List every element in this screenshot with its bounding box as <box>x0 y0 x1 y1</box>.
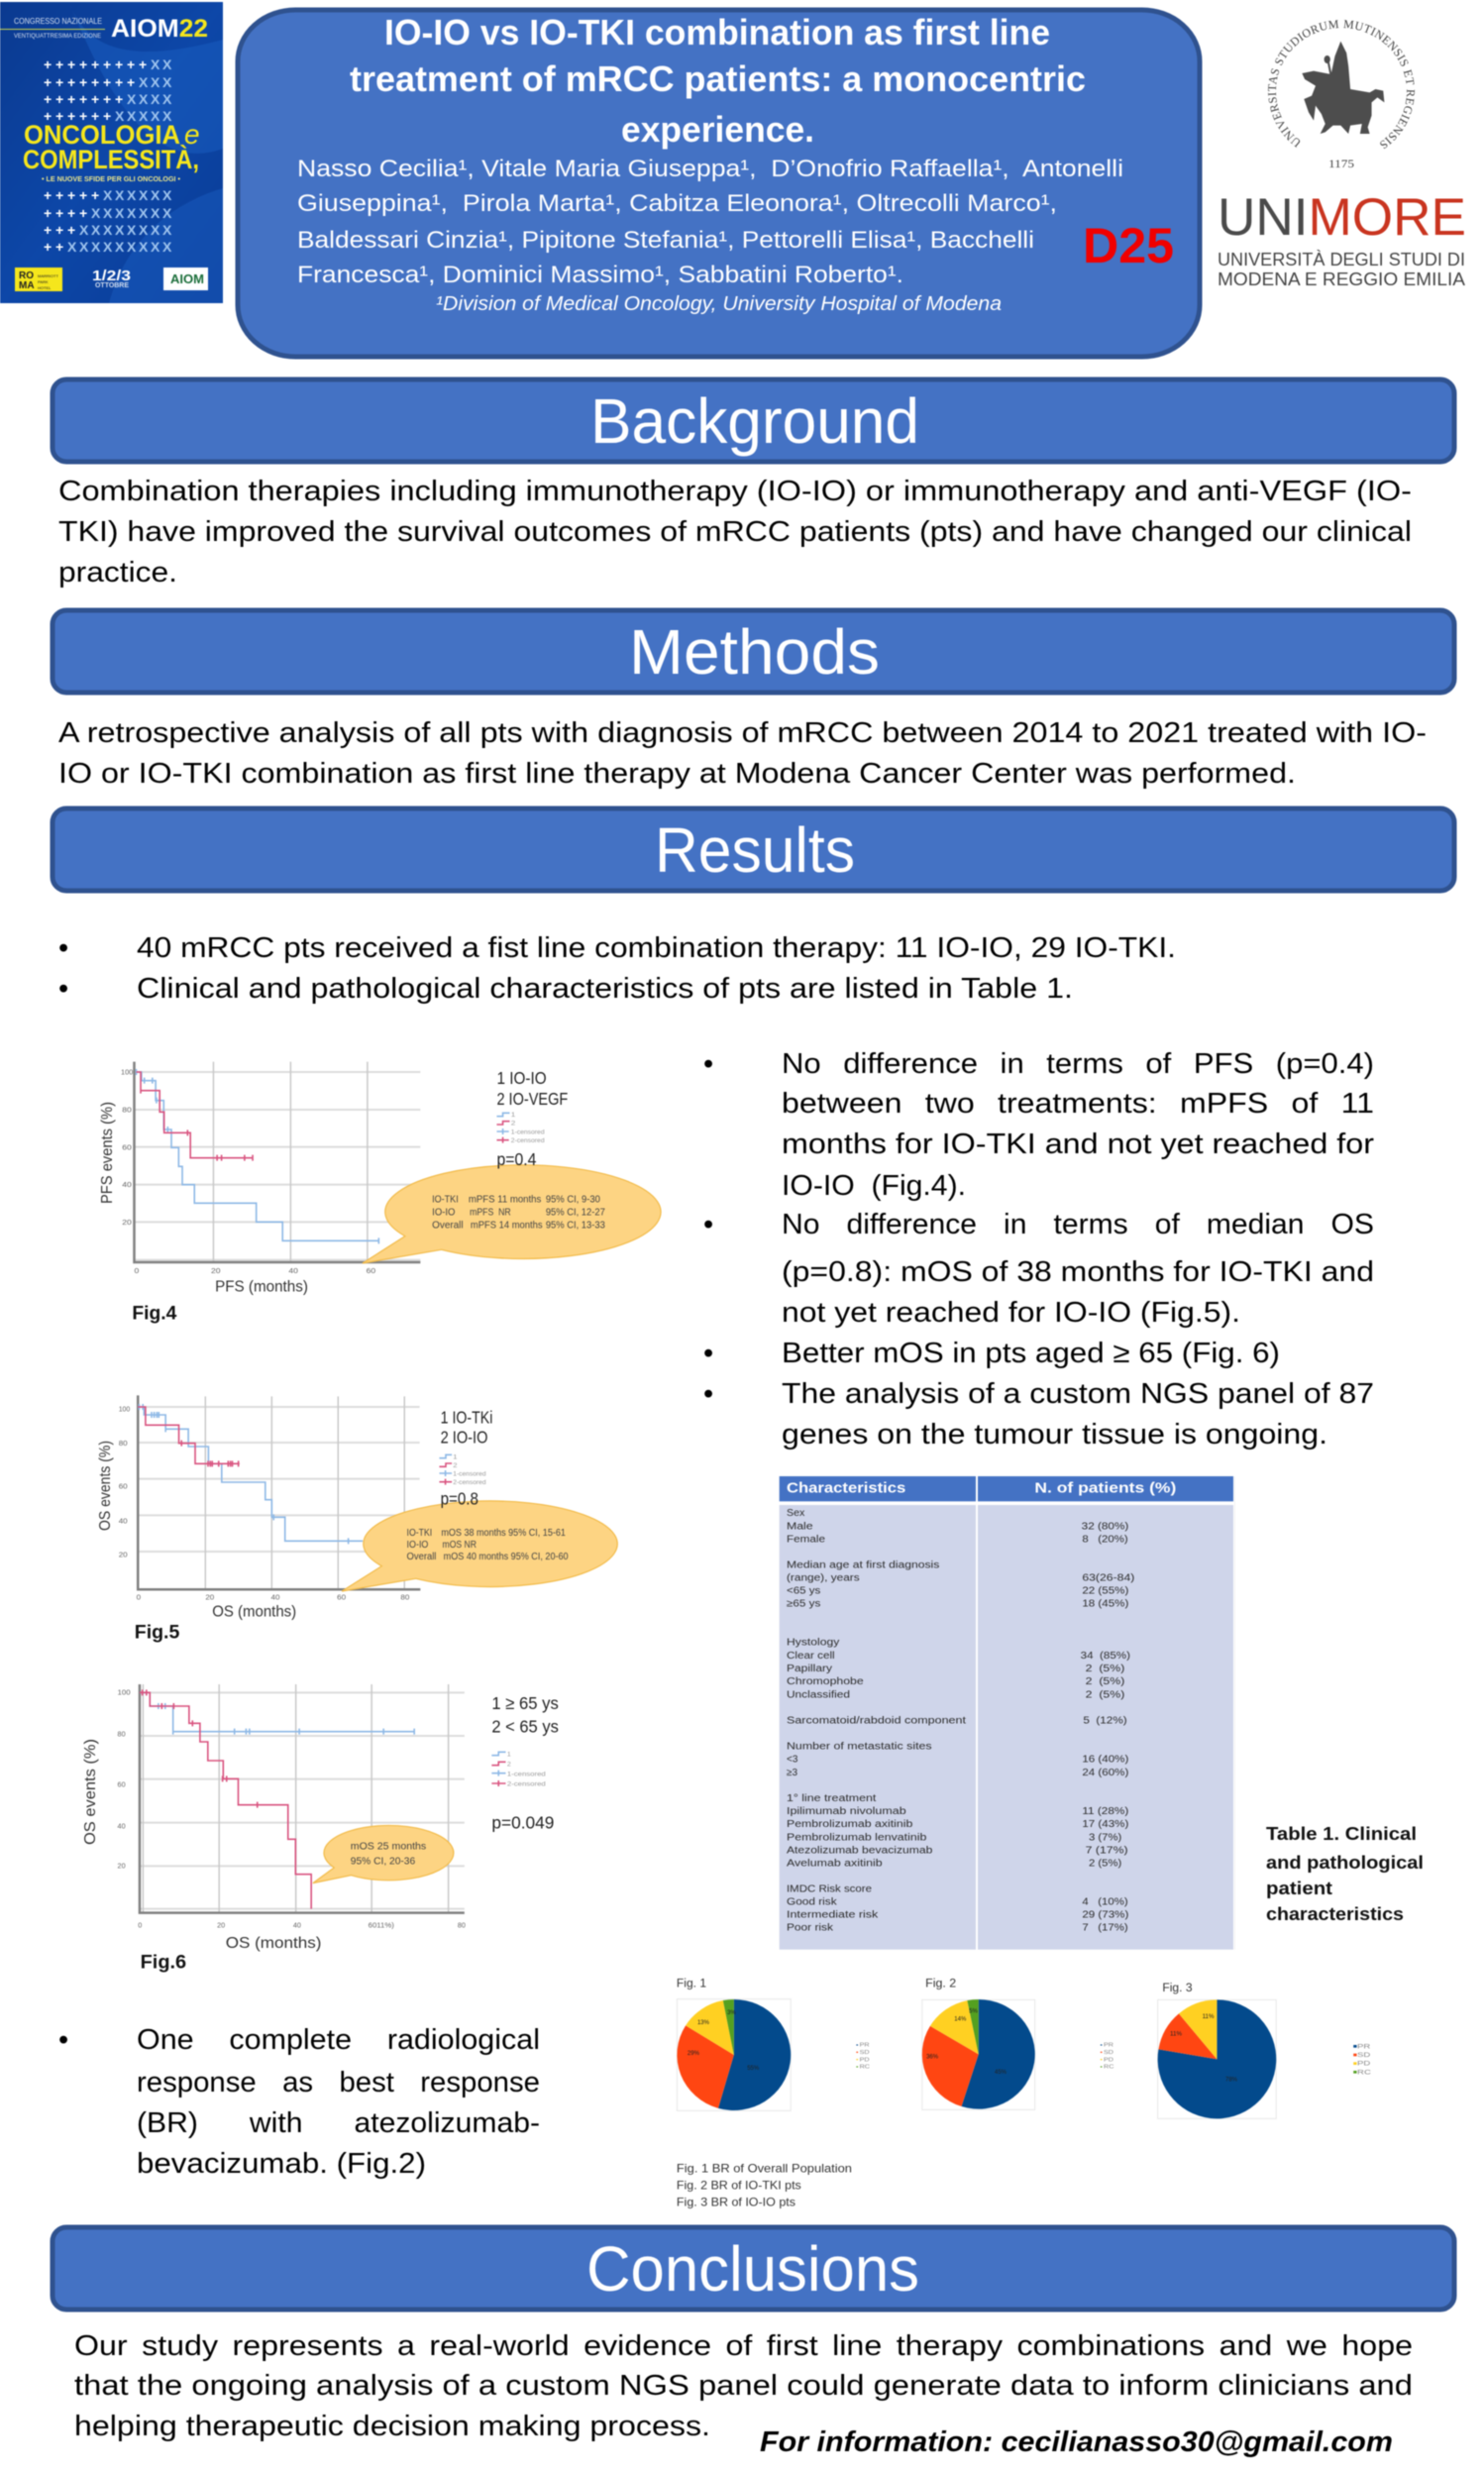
pie: Fig. 1 overall population <box>677 1978 871 2110</box>
complete response bullet: response as best response <box>137 2067 540 2098</box>
legend: SD <box>1357 2051 1370 2059</box>
values column: 17 (43%) <box>1082 1819 1128 1830</box>
congress logo: AIOM22: VENTIQUATTRESIMA EDIZIONE <box>14 33 102 40</box>
congress logo: AIOM22: +++++++ XXXX <box>44 91 172 107</box>
y axis ticks: 60 <box>118 1780 126 1788</box>
table caption: characteristics <box>1266 1904 1404 1924</box>
x axis ticks: 60 <box>337 1593 346 1602</box>
values column: 18 (45%) <box>1082 1599 1128 1610</box>
university logo: UNIMORE: UNIVERSITÀ DEGLI STUDI DI <box>1218 250 1465 269</box>
y axis ticks <box>118 1689 131 1871</box>
legend: PR <box>1104 2043 1114 2048</box>
pie: Fig. 2 IO-TKI <box>922 1978 1114 2109</box>
legend: 1 ≥ 65 ys <box>491 1692 559 1713</box>
right results bullets: No difference in terms of PFS (p=0.4) <box>782 1048 1374 1080</box>
background text: practice. <box>58 557 177 589</box>
x axis ticks: 80 <box>400 1593 409 1602</box>
results intro bullets: 40 mRCC pts received a fist line combination therapy: 11 IO-IO, 29 IO-TKI. <box>137 932 1176 964</box>
y axis ticks: 40 <box>119 1517 128 1525</box>
y axis ticks: 100 <box>118 1689 131 1697</box>
y axis ticks: 80 <box>118 1730 126 1738</box>
x axis ticks: 40 <box>271 1593 279 1602</box>
callout: 95% CI, 12-27 <box>546 1208 605 1218</box>
y axis ticks: 20 <box>122 1219 132 1227</box>
pie: Fig. 2 IO-TKI: 14% <box>954 2015 967 2022</box>
legend <box>491 1692 559 1833</box>
characteristics column: Unclassified <box>787 1689 850 1700</box>
congress logo: AIOM22: AIOM <box>170 271 204 286</box>
legend: 2 <box>453 1461 458 1469</box>
legend: 1 <box>511 1111 515 1119</box>
legend <box>496 1069 568 1169</box>
legend: 1-censored <box>511 1128 545 1135</box>
seal: 1175 <box>1328 157 1354 170</box>
callout: IO-IO <box>432 1208 455 1218</box>
complete response bullet: • <box>58 2024 68 2056</box>
x axis ticks <box>134 1267 376 1275</box>
legend: 2 IO-IO <box>441 1428 487 1448</box>
pie: Fig. 2 IO-TKI: 36% <box>926 2053 939 2060</box>
chart: Fig.6 OS Kaplan-Meier by age <box>82 1684 559 1974</box>
section bar: Results: Results <box>655 814 855 886</box>
right results bullets: • <box>703 1209 713 1240</box>
characteristics column: Male <box>787 1521 813 1532</box>
conclusions text <box>74 2330 1413 2442</box>
legend: PR <box>860 2043 870 2048</box>
x axis ticks: 40 <box>288 1267 299 1275</box>
y axis ticks: 40 <box>118 1822 126 1830</box>
characteristics column: Ipilimumab nivolumab <box>787 1806 906 1817</box>
callout: IO-IO <box>407 1540 429 1551</box>
methods text: A retrospective analysis of all pts with diagnosis of mRCC between 2014 to 2021 treated with IO- <box>58 717 1427 749</box>
results intro bullets: • <box>58 973 68 1005</box>
callout: 95% CI, 20-36 <box>351 1856 415 1868</box>
values column: 63(26-84) <box>1082 1573 1134 1584</box>
table caption: patient <box>1266 1879 1332 1898</box>
section bar: Background: Background <box>590 385 919 457</box>
complete response bullet: bevacizumab. (Fig.2) <box>137 2148 426 2180</box>
title panel <box>238 10 1200 357</box>
y axis ticks: 40 <box>122 1181 132 1189</box>
chart: Fig.6 OS Kaplan-Meier by age: Fig.6 <box>141 1953 186 1974</box>
characteristics column: Hystology <box>787 1638 839 1649</box>
title: experience. <box>621 109 814 150</box>
legend: PR <box>1357 2043 1370 2050</box>
congress logo: AIOM22: MARRIOTT <box>38 273 58 278</box>
right results bullets: months for IO-TKI and not yet reached for <box>782 1129 1374 1160</box>
right results bullets: IO-IO (Fig.4). <box>782 1170 966 1202</box>
callout: 95% CI, 13-33 <box>546 1221 605 1231</box>
pie: Fig. 3 IO-IO <box>1158 1982 1371 2118</box>
right results bullets: No difference in terms of median OS <box>782 1209 1374 1240</box>
characteristics column: <65 ys <box>787 1586 820 1597</box>
characteristics column: Female <box>787 1534 826 1545</box>
curve: age 65 or older <box>140 1692 414 1735</box>
values column: 11 (28%) <box>1082 1806 1128 1817</box>
characteristics column: Pembrolizumab lenvatinib <box>787 1832 927 1843</box>
y axis title: OS events (%) <box>82 1739 99 1845</box>
congress logo: AIOM22: CONGRESSO NAZIONALE <box>14 16 102 26</box>
values column: 24 (60%) <box>1082 1768 1128 1778</box>
characteristics column: Sex <box>787 1508 804 1519</box>
chart: Fig.4 PFS Kaplan-Meier: Fig.4 <box>132 1304 176 1324</box>
legend: 2 IO-VEGF <box>496 1090 568 1109</box>
legend: RC <box>860 2065 871 2070</box>
congress logo: AIOM22: OTTOBRE <box>95 282 129 289</box>
complete response bullet <box>58 2024 540 2180</box>
callout: mPFS 11 months <box>469 1194 542 1205</box>
congress logo: AIOM22: +++++++++ XX <box>44 56 172 72</box>
legend: p=0.4 <box>496 1150 536 1169</box>
y axis ticks: 60 <box>122 1143 132 1151</box>
right results bullets: Better mOS in pts aged ≥ 65 (Fig. 6) <box>782 1338 1280 1369</box>
section bar: Methods: Methods <box>629 616 880 688</box>
authors: Baldessari Cinzia¹, Pipitone Stefania¹, Pettorelli Elisa¹, Bacchelli <box>297 227 1034 254</box>
seal: UNIVERSITAS STUDIORUM MUTINENSIS ET REGIENSIS <box>1267 20 1416 150</box>
legend <box>1101 2043 1114 2070</box>
y axis title: PFS events (%) <box>99 1102 116 1204</box>
table header: N. of patients (%) <box>1034 1481 1176 1497</box>
legend: 1 IO-IO <box>496 1069 547 1088</box>
table caption: and pathological <box>1266 1853 1424 1873</box>
legend: 2 <box>511 1119 515 1127</box>
complete response bullet: One complete radiological <box>137 2024 540 2056</box>
congress logo: AIOM22: ++++ XXXXXXX <box>44 205 172 221</box>
values column: 2 (5%) <box>1086 1664 1124 1674</box>
legend: 1-censored <box>507 1771 546 1777</box>
legend: PD <box>860 2057 870 2063</box>
curve: IO-VEGF <box>137 1072 253 1161</box>
legend: RC <box>1357 2069 1371 2076</box>
values column: 32 (80%) <box>1082 1521 1128 1532</box>
section bar: Conclusions: Conclusions <box>586 2233 919 2305</box>
congress logo: AIOM22: ++++++++ XXX <box>44 74 172 90</box>
congress logo: AIOM22: 1/2/3 <box>92 268 131 284</box>
callout: Overall <box>432 1221 464 1231</box>
pie: Fig. 2 IO-TKI: 45% <box>995 2068 1007 2076</box>
x axis ticks: 40 <box>293 1922 301 1930</box>
characteristics column: Median age at first diagnosis <box>787 1559 939 1570</box>
values column: 2 (5%) <box>1086 1676 1124 1687</box>
characteristics column <box>787 1508 966 1934</box>
right results bullets: The analysis of a custom NGS panel of 87 <box>782 1378 1374 1410</box>
curve: under 65 <box>140 1689 311 1909</box>
right results bullets: • <box>703 1048 713 1080</box>
x axis ticks: 0 <box>138 1922 142 1930</box>
pie: Fig. 1 overall population: 55% <box>747 2064 760 2072</box>
values column: 4 (10%) <box>1082 1897 1128 1908</box>
title: IO-IO vs IO-TKI combination as first line <box>384 12 1050 53</box>
table header <box>787 1481 1176 1497</box>
legend: 1-censored <box>453 1470 486 1477</box>
callout <box>313 1825 454 1883</box>
pie: Fig. 1 overall population: 29% <box>688 2049 699 2057</box>
legend: p=0.8 <box>441 1489 478 1509</box>
y axis ticks: 100 <box>119 1405 130 1413</box>
callout: IO-TKI <box>407 1528 432 1539</box>
poster number: D25 <box>1083 218 1174 273</box>
legend <box>439 1408 492 1509</box>
y axis ticks: 100 <box>121 1068 134 1076</box>
pie captions <box>677 2163 852 2209</box>
pie: Fig. 1 overall population: 3% <box>727 2008 736 2016</box>
legend: SD <box>860 2050 870 2056</box>
conclusions text: that the ongoing analysis of a custom NGS panel could generate data to inform clinicians and <box>74 2370 1413 2402</box>
authors: Francesca¹, Dominici Massimo¹, Sabbatini Roberto¹. <box>297 262 903 288</box>
x axis ticks: 20 <box>205 1593 214 1602</box>
chart: Fig.4 PFS Kaplan-Meier: PFS (months) <box>215 1277 308 1295</box>
pie: Fig. 1 overall population: 13% <box>697 2018 709 2026</box>
callout: Overall <box>407 1552 436 1562</box>
pie captions: Fig. 3 BR of IO-IO pts <box>677 2197 795 2209</box>
callout <box>363 1165 661 1263</box>
characteristics column: Chromophobe <box>787 1676 864 1687</box>
pie: Fig. 2 IO-TKI: Fig. 2 <box>925 1978 956 1990</box>
congress logo: AIOM22: • LE NUOVE SFIDE PER GLI ONCOLOGI • <box>42 176 181 183</box>
pie: Fig. 3 IO-IO: 78% <box>1225 2076 1237 2083</box>
x axis ticks: 6011%) <box>369 1922 394 1930</box>
values column: 16 (40%) <box>1082 1755 1128 1766</box>
pie captions: Fig. 2 BR of IO-TKI pts <box>677 2180 801 2193</box>
callout: mOS 40 months 95% CI, 20-60 <box>444 1552 569 1562</box>
section bar: Conclusions <box>53 2227 1454 2310</box>
characteristics column: Clear cell <box>787 1651 835 1662</box>
callout: mOS 25 months <box>351 1841 426 1853</box>
table 1: patient characteristics <box>780 1476 1235 1950</box>
characteristics column: Sarcomatoid/rabdoid component <box>787 1716 966 1727</box>
background text: Combination therapies including immunotherapy (IO-IO) or immunotherapy and anti-VEGF (IO- <box>58 476 1412 507</box>
x axis ticks <box>138 1922 466 1930</box>
x axis ticks: 0 <box>134 1267 140 1275</box>
characteristics column: Atezolizumab bevacizumab <box>787 1845 933 1856</box>
conclusions text: helping therapeutic decision making process. <box>74 2411 710 2442</box>
legend: 1 <box>453 1453 458 1460</box>
values column <box>1081 1521 1134 1934</box>
congress logo: AIOM22: PARK <box>38 279 49 284</box>
legend <box>1353 2043 1371 2076</box>
x axis ticks: 60 <box>367 1267 376 1275</box>
legend: 1 IO-TKi <box>441 1408 492 1428</box>
methods text <box>58 717 1427 790</box>
curve: IO-TKi <box>138 1404 363 1544</box>
characteristics column: (range), years <box>787 1573 860 1584</box>
callout: 95% CI, 9-30 <box>546 1194 600 1205</box>
congress logo: AIOM22: MA <box>19 280 35 291</box>
congress logo: AIOM22: ++++++ XXXXX <box>44 108 172 124</box>
x axis ticks: 20 <box>217 1922 225 1930</box>
congress logo: AIOM22: HOTEL <box>38 285 52 290</box>
x axis ticks: 80 <box>458 1922 466 1930</box>
characteristics column: Intermediate risk <box>787 1910 878 1921</box>
values column: 5 (12%) <box>1083 1716 1127 1727</box>
legend: 2-censored <box>453 1478 486 1486</box>
values column: 3 (7%) <box>1089 1832 1121 1843</box>
chart: Fig.6 OS Kaplan-Meier by age: OS (months) <box>226 1934 321 1952</box>
authors <box>297 156 1123 288</box>
congress logo: AIOM22: AIOM22 <box>111 15 208 43</box>
characteristics column: Number of metastatic sites <box>787 1742 932 1753</box>
congress logo: AIOM22: +++++ XXXXXX <box>44 187 172 203</box>
y axis ticks: 20 <box>118 1863 126 1871</box>
legend: 2-censored <box>511 1136 545 1144</box>
characteristics column: ≥65 ys <box>787 1599 820 1610</box>
university logo: UNIMORE <box>1218 20 1466 289</box>
contact email: For information: cecilianasso30@gmail.com <box>760 2426 1393 2458</box>
curve: IO-IO <box>137 1069 378 1243</box>
wordmark: UNIMORE <box>1218 188 1466 247</box>
callout: mPFS 14 months <box>471 1221 543 1231</box>
values column: 8 (20%) <box>1082 1534 1128 1545</box>
congress logo: AIOM22: COMPLESSITÀ, <box>23 144 199 174</box>
table caption <box>1266 1824 1424 1924</box>
characteristics column: 1° line treatment <box>787 1793 877 1804</box>
right results bullets: between two treatments: mPFS of 11 <box>782 1088 1374 1120</box>
affiliation: ¹Division of Medical Oncology, University Hospital of Modena <box>436 292 1002 315</box>
legend: 2 <box>507 1761 511 1768</box>
congress logo: AIOM22: +++ XXXXXXXX <box>44 222 172 238</box>
y axis ticks <box>121 1068 134 1227</box>
callout: mOS 38 months 95% CI, 15-61 <box>441 1528 566 1539</box>
conclusions text: Our study represents a real-world evidence of first line therapy combinations and we hope <box>74 2330 1413 2362</box>
section bar: Results <box>53 808 1454 891</box>
x axis ticks: 0 <box>137 1593 141 1602</box>
table header: Characteristics <box>787 1481 905 1497</box>
table caption: Table 1. Clinical <box>1266 1824 1417 1844</box>
callout: IO-TKI <box>432 1194 459 1205</box>
values column: 7 (17%) <box>1082 1923 1128 1934</box>
legend: PD <box>1357 2060 1370 2067</box>
title: treatment of mRCC patients: a monocentric <box>350 58 1086 99</box>
callout: mOS NR <box>443 1540 477 1551</box>
chart: Fig.5 OS Kaplan-Meier by treatment: Fig.5 <box>135 1622 179 1643</box>
values column: 2 (5%) <box>1089 1858 1121 1869</box>
y axis ticks: 80 <box>119 1439 128 1448</box>
congress logo: AIOM22: RO <box>19 270 34 281</box>
pie: Fig. 2 IO-TKI: 5% <box>969 2007 978 2014</box>
characteristics column: IMDC Risk score <box>787 1883 873 1894</box>
values column: 22 (55%) <box>1082 1586 1128 1597</box>
title <box>350 12 1086 150</box>
background text <box>58 476 1412 589</box>
y axis ticks: 80 <box>122 1106 132 1114</box>
congress logo: AIOM22: ONCOLOGIA <box>24 120 180 150</box>
pie: Fig. 3 IO-IO: 11% <box>1203 2012 1215 2020</box>
pie: Fig. 3 IO-IO: 11% <box>1170 2030 1183 2037</box>
methods text: IO or IO-TKI combination as first line therapy at Modena Cancer Center was performed. <box>58 758 1296 790</box>
characteristics column: Good risk <box>787 1897 837 1908</box>
values column: 34 (85%) <box>1081 1651 1130 1662</box>
pie: Fig. 1 overall population: Fig. 1 <box>677 1978 706 1990</box>
characteristics column: Pembrolizumab axitinib <box>787 1819 913 1830</box>
values column: 29 (73%) <box>1082 1910 1128 1921</box>
characteristics column: Poor risk <box>787 1923 833 1934</box>
chart: Fig.5 OS Kaplan-Meier by treatment: OS (months) <box>212 1602 296 1620</box>
callout <box>342 1501 617 1591</box>
congress logo: AIOM22: e <box>184 119 200 150</box>
characteristics column: <3 <box>787 1755 798 1766</box>
x axis ticks: 20 <box>211 1267 221 1275</box>
results intro bullets: • <box>58 932 68 964</box>
legend <box>856 2043 871 2070</box>
results intro bullets <box>58 932 1176 1005</box>
right results bullets: • <box>703 1338 713 1369</box>
characteristics column: Avelumab axitinib <box>787 1858 883 1869</box>
values column: 7 (17%) <box>1086 1845 1128 1856</box>
complete response bullet: (BR) with atezolizumab- <box>137 2107 540 2139</box>
y axis title: OS events (%) <box>97 1441 114 1531</box>
values column: 2 (5%) <box>1086 1689 1124 1700</box>
y axis ticks: 60 <box>119 1482 128 1490</box>
legend: PD <box>1104 2057 1114 2063</box>
chart: Fig.5 OS Kaplan-Meier by treatment <box>97 1395 617 1643</box>
pie captions: Fig. 1 BR of Overall Population <box>677 2163 852 2176</box>
characteristics column: ≥3 <box>787 1768 797 1778</box>
pie: Fig. 3 IO-IO: Fig. 3 <box>1162 1982 1193 1994</box>
section bar: Background <box>53 379 1454 462</box>
background text: TKI) have improved the survival outcomes of mRCC patients (pts) and have changed our clinical <box>58 516 1412 548</box>
right results bullets: genes on the tumour tissue is ongoing. <box>782 1419 1327 1451</box>
right results bullets: • <box>703 1378 713 1410</box>
legend: SD <box>1104 2050 1114 2056</box>
authors: Nasso Cecilia¹, Vitale Maria Giuseppa¹, D’Onofrio Raffaella¹, Antonelli <box>297 156 1123 182</box>
legend: 2 < 65 ys <box>491 1716 559 1736</box>
section bar: Methods <box>53 610 1454 693</box>
right results bullets <box>703 1048 1374 1451</box>
right results bullets: not yet reached for IO-IO (Fig.5). <box>782 1297 1240 1329</box>
legend: 2-censored <box>507 1781 546 1788</box>
y axis ticks: 20 <box>119 1551 128 1559</box>
callout: mPFS NR <box>470 1208 511 1218</box>
authors: Giuseppina¹, Pirola Marta¹, Cabitza Eleonora¹, Oltrecolli Marco¹, <box>297 190 1057 217</box>
congress logo: AIOM22: ++ XXXXXXXXX <box>44 239 172 255</box>
right results bullets: (p=0.8): mOS of 38 months for IO-TKI and <box>782 1256 1374 1288</box>
university logo: UNIMORE: MODENA E REGGIO EMILIA <box>1218 269 1465 289</box>
results intro bullets: Clinical and pathological characteristics of pts are listed in Table 1. <box>137 973 1073 1005</box>
best response pies <box>677 1978 1371 2209</box>
curve: IO-IO <box>138 1407 240 1466</box>
characteristics column: Papillary <box>787 1664 832 1674</box>
legend: p=0.049 <box>491 1812 554 1833</box>
chart: Fig.4 PFS Kaplan-Meier <box>99 1062 661 1324</box>
legend: 1 <box>507 1751 511 1758</box>
y axis ticks <box>119 1405 130 1559</box>
legend: RC <box>1104 2065 1114 2070</box>
x axis ticks <box>137 1593 409 1602</box>
congress logo: AIOM22 <box>0 2 223 303</box>
